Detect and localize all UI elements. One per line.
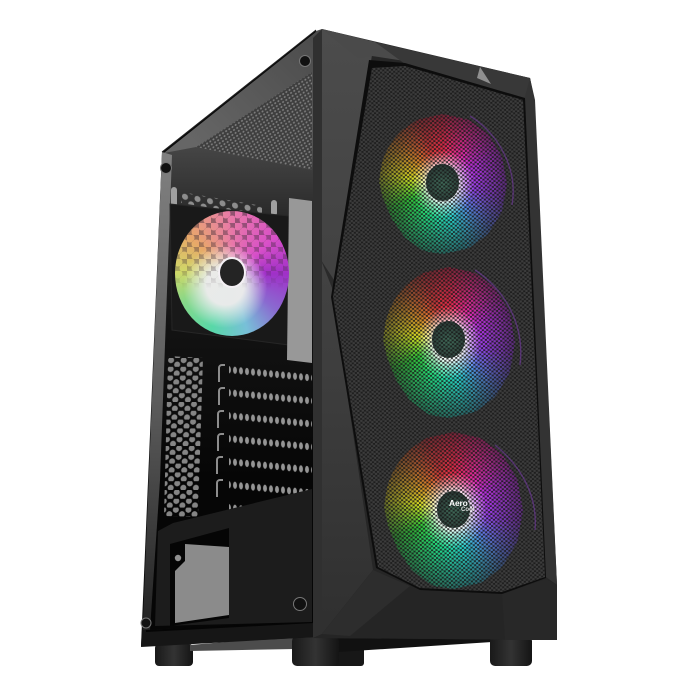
infographic: RGB PC tower case [140, 29, 557, 666]
fan mount slots [171, 187, 277, 216]
mesh surround [331, 60, 546, 594]
feet [155, 634, 532, 666]
fan 1 hub [426, 164, 459, 201]
rear vent [164, 356, 203, 517]
fan rim highlights [470, 116, 535, 530]
mesh base [333, 66, 545, 592]
side glass frame and interior [141, 30, 316, 647]
PSU shroud [155, 489, 312, 626]
side fan honeycomb grille [175, 211, 289, 286]
PSU screw hole [175, 555, 181, 561]
side fan hub [218, 257, 246, 288]
front fan 2 [383, 267, 515, 418]
PSU window [170, 528, 229, 626]
logo on fan hub [449, 499, 474, 512]
side fan [175, 211, 289, 336]
PCI slot brackets [217, 365, 225, 497]
front fan 1 [379, 114, 507, 254]
PCI slot perforations [229, 360, 312, 510]
front frame [313, 29, 557, 640]
grey rear bracket [287, 198, 312, 363]
fan 2 hub [432, 321, 465, 358]
side fan frame [170, 204, 289, 345]
top vent holes [181, 192, 262, 216]
PSU bay [175, 544, 229, 623]
case body [141, 29, 557, 666]
brand suffix: Cool [461, 506, 474, 512]
fan 3 hub [437, 491, 470, 528]
front fan 3 [384, 432, 523, 589]
